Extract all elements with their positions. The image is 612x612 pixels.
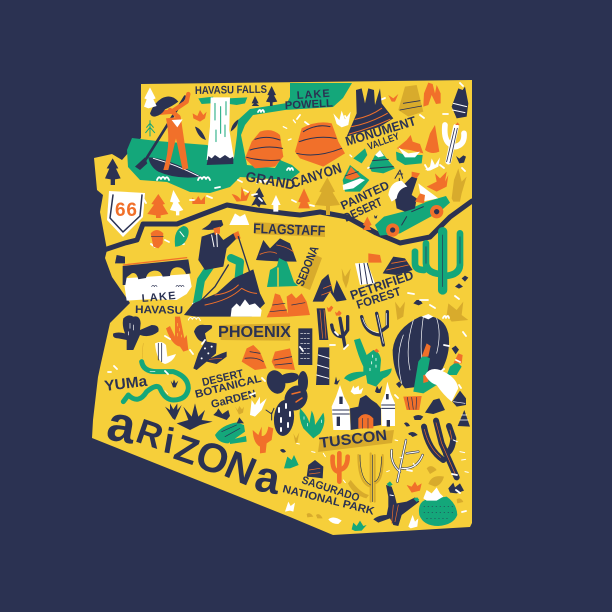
petrified forest heading and items: PETRIFIED — [348, 267, 415, 303]
heading: Yuma: YUMa — [103, 373, 149, 395]
prickly pear cacti, west — [113, 315, 227, 370]
heading: Sagurado National Park: SAGURADO — [300, 474, 361, 505]
southern cacti — [333, 421, 457, 502]
balloon pot and surfboard — [115, 213, 249, 263]
map of Arizona — [92, 80, 472, 535]
green prickly pear, centre — [334, 338, 392, 394]
waterfall — [198, 97, 247, 165]
white marks, north — [120, 83, 465, 262]
orange sedona rocks — [219, 293, 310, 341]
heading: Desert Botanical Garden: BOTANICAL — [194, 373, 263, 401]
heading: Desert Botanical Garden — [194, 368, 263, 411]
heading: Monument Valley: MONUMENT — [343, 113, 418, 149]
heading: Arizona — [103, 395, 284, 504]
66 route shield — [107, 191, 145, 237]
heading: Arizona: Z — [169, 427, 204, 473]
snake — [123, 343, 188, 402]
barrel cactus with hiker and dog — [393, 314, 470, 435]
road — [104, 201, 472, 250]
stand up paddler — [135, 94, 202, 178]
heading: Arizona: O — [190, 431, 235, 485]
rocks below phoenix — [242, 345, 295, 370]
petrified rocks and stump — [342, 253, 468, 322]
flagstaff rocks — [256, 238, 297, 262]
heading: Flagstaff: FLAGSTAFF — [253, 220, 326, 239]
heading: Arizona: N — [218, 443, 262, 495]
sedona label and rocks: SEDONA — [293, 244, 322, 288]
heading: Tuscon: TUSCON — [318, 427, 388, 452]
centre buildings and cacti — [298, 274, 387, 385]
heading: Havasu Falls: HAVASU FALLS — [195, 84, 267, 97]
mountain with snow — [184, 269, 265, 321]
heading: Grand Canyon — [244, 160, 343, 193]
heading: Grand Canyon: CANYON — [289, 160, 343, 191]
heading: Lake Powell — [285, 88, 333, 112]
jeep with driver — [375, 172, 450, 237]
heading: Arizona: a — [103, 395, 141, 455]
66 route shield: 66 — [115, 200, 137, 221]
trees near canyon — [298, 177, 377, 230]
mission church — [332, 382, 395, 430]
painted desert rocks — [343, 125, 467, 202]
heading: Lake Powell: POWELL — [285, 97, 333, 112]
heading: Monument Valley: VALLEY — [366, 131, 401, 153]
heading: Desert Botanical Garden: GaRDEN — [210, 388, 257, 411]
heading: Lake Havasu: LAKE — [141, 290, 176, 305]
heading: Phoenix: PHOENIX — [218, 324, 291, 341]
heading: Lake Powell: LAKE — [296, 88, 330, 102]
grand canyon rock — [245, 130, 283, 168]
heading: Arizona: R — [131, 412, 168, 457]
heading: Arizona: a — [251, 452, 284, 504]
scattered white marks, south — [108, 293, 466, 512]
petrified forest heading and items: FOREST — [355, 284, 403, 312]
green agave and small cactus, south — [280, 408, 324, 478]
desert plants, centre — [165, 397, 274, 453]
heading: Painted Desert: PAINTED — [338, 178, 392, 213]
south east plants and barrel — [285, 440, 468, 531]
heading: Arizona: i — [161, 420, 178, 462]
tall green saguaro — [413, 232, 468, 305]
white lake havasu and bridge — [123, 258, 192, 301]
heading: Lake Havasu: HAVASU — [135, 304, 183, 317]
heading: Grand Canyon: GRAND — [244, 168, 296, 193]
heading: Sagurado National Park: NATIONAL PARK — [281, 483, 375, 518]
heading: Lake Havasu — [135, 290, 183, 317]
hiker — [192, 220, 253, 310]
heading: Painted Desert: DESERT — [341, 194, 385, 225]
sedona label and rocks — [267, 244, 322, 290]
white saguaro, north east — [445, 122, 466, 163]
rocks near canyon — [283, 120, 352, 167]
heading: Desert Botanical Garden: DESERT — [201, 368, 245, 389]
green river and lakes — [127, 83, 352, 193]
trees and plants, north west — [105, 86, 281, 218]
monument valley rock — [333, 83, 468, 137]
navy prickly pear, centre — [263, 368, 312, 437]
